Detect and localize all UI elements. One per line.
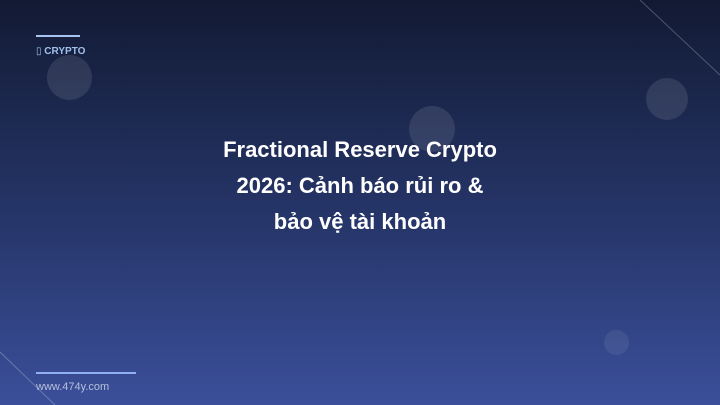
footer url: www.474y.com xyxy=(36,381,109,393)
bottom accent line xyxy=(36,372,136,374)
title: bảo vệ tài khoản xyxy=(274,209,446,234)
circle decoration xyxy=(604,330,629,355)
title xyxy=(223,137,497,234)
circle decoration xyxy=(409,106,455,152)
circle decoration xyxy=(47,55,92,100)
category label: ▯ CRYPTO xyxy=(36,46,85,57)
circle decoration xyxy=(646,78,688,120)
top accent line xyxy=(36,35,80,37)
title: 2026: Cảnh báo rủi ro & xyxy=(237,173,483,198)
title: Fractional Reserve Crypto xyxy=(223,137,497,162)
